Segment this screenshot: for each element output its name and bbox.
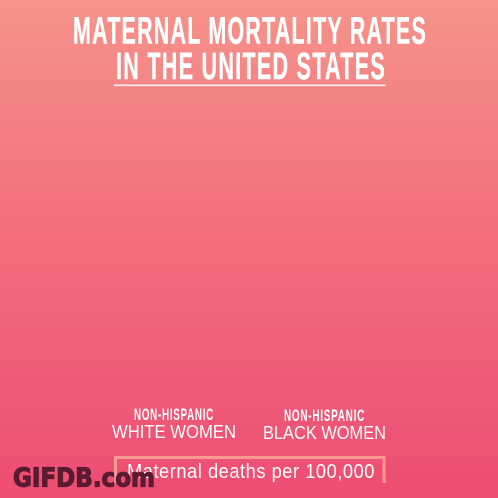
title <box>73 10 427 88</box>
watermark: GIFDB.com <box>13 464 155 494</box>
column label: non-Hispanic black women <box>263 407 386 443</box>
column label: non-Hispanic white women: WHITE WOMEN <box>112 422 236 442</box>
column label: non-Hispanic black women: NON-HISPANIC <box>284 407 365 425</box>
column label: non-Hispanic white women <box>112 406 236 442</box>
column label: non-Hispanic white women: NON-HISPANIC <box>134 406 214 424</box>
column label: non-Hispanic black women: BLACK WOMEN <box>263 423 386 443</box>
legend box: maternal deaths per 100,000: Maternal deaths per 100,000 <box>127 460 375 483</box>
